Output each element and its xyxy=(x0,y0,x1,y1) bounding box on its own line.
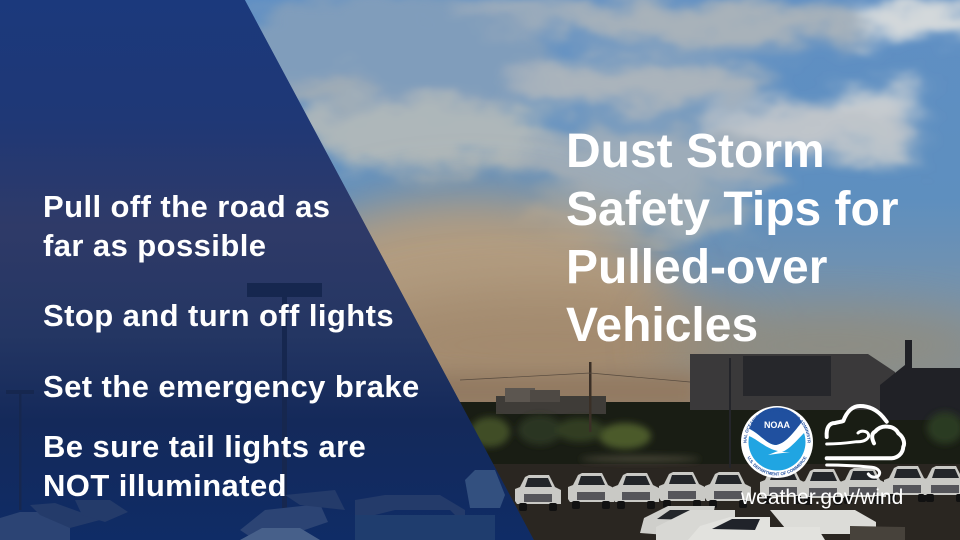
icon: NOAA logo xyxy=(741,406,813,478)
icon: NOAA logo: U.S. DEPARTMENT OF COMMERCE xyxy=(748,456,807,476)
title: Safety Tips for xyxy=(566,183,899,236)
white trucks xyxy=(515,475,561,511)
tip: pull off the road xyxy=(43,189,330,263)
utility pole xyxy=(589,362,592,432)
title: Pulled-over xyxy=(566,241,827,294)
icon: NOAA logo: NOAA xyxy=(764,420,790,430)
faded parked vehicles xyxy=(0,470,505,540)
ground xyxy=(0,340,960,540)
tip: be sure tail lights are not illuminated: NOT illuminated xyxy=(43,468,287,503)
tip: set the emergency brake: Set the emergency brake xyxy=(43,369,420,404)
translucent navy panel with faded parking lot behind it xyxy=(0,0,534,540)
title xyxy=(566,125,899,352)
tip: pull off the road: far as possible xyxy=(43,228,266,263)
tip: stop and turn off lights: Stop and turn off lights xyxy=(43,298,394,333)
lamp posts xyxy=(6,283,322,510)
title: Vehicles xyxy=(566,299,758,352)
clouds xyxy=(230,0,960,239)
foreground vehicles xyxy=(640,506,715,536)
dust cloud xyxy=(270,195,960,412)
trees xyxy=(470,412,960,462)
title: Dust Storm xyxy=(566,125,825,178)
icon: cloud and wind xyxy=(824,404,906,479)
distant buildings xyxy=(496,388,606,414)
tip: pull off the road: Pull off the road as xyxy=(43,189,330,224)
tips list xyxy=(43,189,420,503)
tip: be sure tail lights are not illuminated: Be sure tail lights are xyxy=(43,429,366,464)
tip: be sure tail lights are not illuminated xyxy=(43,429,366,503)
website link: weather.gov/wind xyxy=(741,486,903,509)
